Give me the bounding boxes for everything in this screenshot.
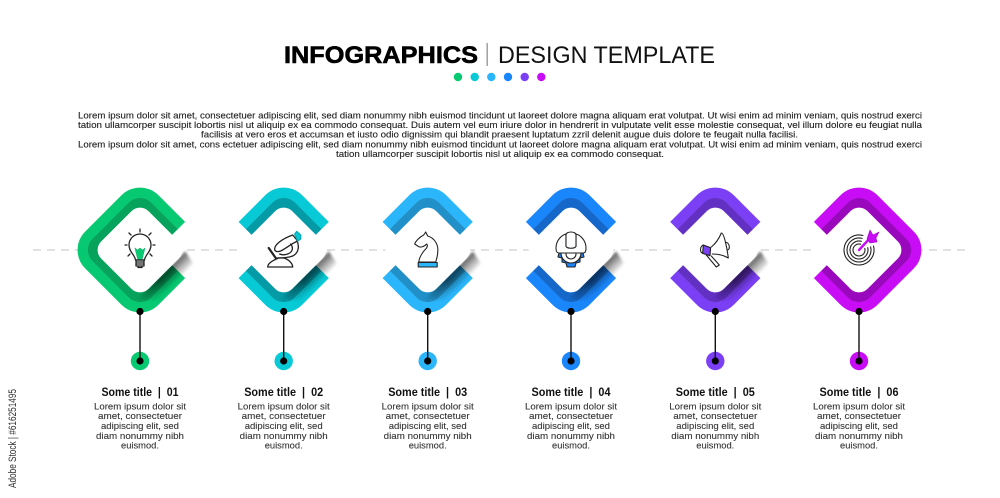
panel: step 03 <box>382 188 481 448</box>
step text 04: euismod. <box>552 441 590 452</box>
connector 05 <box>706 308 724 370</box>
step text 01: adipiscing elit, sed <box>101 421 179 432</box>
panel: step 01 <box>78 188 193 448</box>
step text 03: amet, consectetuer <box>386 411 471 422</box>
title colour dots <box>454 73 546 81</box>
icon: chess knight <box>415 232 438 267</box>
diamond frame 04 <box>526 188 624 312</box>
icon: microscope <box>268 232 301 267</box>
step text 01: diam nonummy nibh <box>96 431 184 442</box>
step text 04 <box>525 402 617 452</box>
icon: megaphone <box>701 233 729 267</box>
step title 04: Some title | 04 <box>532 387 611 399</box>
title <box>284 42 715 69</box>
diamond frame 03 <box>382 188 481 312</box>
panel: step 05 <box>670 188 768 448</box>
step text 05 <box>669 402 762 452</box>
connector 02 <box>274 308 293 370</box>
panel: step 04 <box>526 188 624 448</box>
step title 05: Some title | 05 <box>676 387 755 399</box>
step text 02 <box>238 402 330 452</box>
intro text block <box>78 109 923 159</box>
step text 06 <box>813 402 905 452</box>
step text 01: amet, consectetuer <box>98 411 183 422</box>
connector 06 <box>850 308 868 370</box>
step text 06: adipiscing elit, sed <box>820 421 898 432</box>
stock id side label: Adobe Stock | #616251495 <box>7 389 19 488</box>
step text 02: diam nonummy nibh <box>240 431 328 442</box>
step title 06: Some title | 06 <box>820 387 898 399</box>
intro text block: facilisis at vero eros et accumsan et iusto odio dignissim qui blandit praesent luptatum zzril delenit augue duis dolore te feugait nulla facilisi. <box>201 129 798 140</box>
step title 03: Some title | 03 <box>388 387 467 399</box>
intro text block: tation ullamcorper suscipit lobortis nisl ut aliquip ex ea commodo consequat. Duis autem vel eum iriure dolor in hendrerit in vulputate velit esse molestie consequat, vel illum dolore eu feugiat nulla <box>78 119 923 130</box>
panel: step 02 <box>238 188 337 448</box>
step text 01 <box>94 402 186 452</box>
step text 06: Lorem ipsum dolor sit <box>813 402 905 412</box>
step text 05: Lorem ipsum dolor sit <box>669 402 762 412</box>
step text 05: diam nonummy nibh <box>671 431 759 442</box>
intro text block: tation ullamcorper suscipit lobortis nisl ut aliquip ex ea commodo consequat. <box>336 148 664 159</box>
diamond frame 05 <box>670 188 768 312</box>
step text 02: Lorem ipsum dolor sit <box>238 402 330 412</box>
step text 03 <box>382 402 474 452</box>
diamond frame 01 <box>78 188 193 312</box>
step text 06: diam nonummy nibh <box>815 431 903 442</box>
title: DESIGN TEMPLATE <box>498 42 715 69</box>
step text 01: Lorem ipsum dolor sit <box>94 402 186 412</box>
intro text block: Lorem ipsum dolor sit amet, cons ectetuer adipiscing elit, sed diam nonummy nibh euismod tincidunt ut laoreet dolore magna aliquam erat volutpat. Ut wisi enim ad minim veniam, quis nostrud exerci <box>78 138 922 150</box>
diamond frame 02 <box>238 188 337 312</box>
connector 01 <box>131 308 149 370</box>
step text 03: adipiscing elit, sed <box>389 421 467 432</box>
step text 05: euismod. <box>696 441 734 452</box>
step text 02: amet, consectetuer <box>242 411 327 422</box>
step text 04: diam nonummy nibh <box>527 431 615 442</box>
step text 03: diam nonummy nibh <box>384 431 472 442</box>
step text 03: euismod. <box>409 441 447 452</box>
step title 02: Some title | 02 <box>244 387 323 399</box>
step text 04: Lorem ipsum dolor sit <box>525 402 617 412</box>
connector 04 <box>562 308 580 370</box>
step text 04: amet, consectetuer <box>529 411 614 422</box>
step text 06: amet, consectetuer <box>817 411 902 422</box>
step text 03: Lorem ipsum dolor sit <box>382 402 474 412</box>
diamond frame 06 <box>793 184 925 316</box>
step text 05: amet, consectetuer <box>673 411 758 422</box>
panel: step 06 <box>793 184 925 452</box>
title: INFOGRAPHICS <box>284 42 478 69</box>
icon: light bulb <box>125 229 155 268</box>
step text 06: euismod. <box>840 441 878 452</box>
connector 03 <box>418 308 437 370</box>
intro text block: Lorem ipsum dolor sit amet, consectetuer adipiscing elit, sed diam nonummy nibh euismod tincidunt ut laoreet dolore magna aliquam erat volutpat. Ut wisi enim ad minim veniam, quis nostrud exerci <box>78 109 922 120</box>
step text 05: adipiscing elit, sed <box>676 421 754 432</box>
step text 02: adipiscing elit, sed <box>245 421 323 432</box>
step text 01: euismod. <box>121 441 159 452</box>
step text 04: adipiscing elit, sed <box>532 421 610 432</box>
icon: helmet and gear <box>556 232 586 267</box>
step text 02: euismod. <box>265 441 303 452</box>
step title 01: Some title | 01 <box>102 387 179 399</box>
icon: target and dart <box>844 230 879 265</box>
